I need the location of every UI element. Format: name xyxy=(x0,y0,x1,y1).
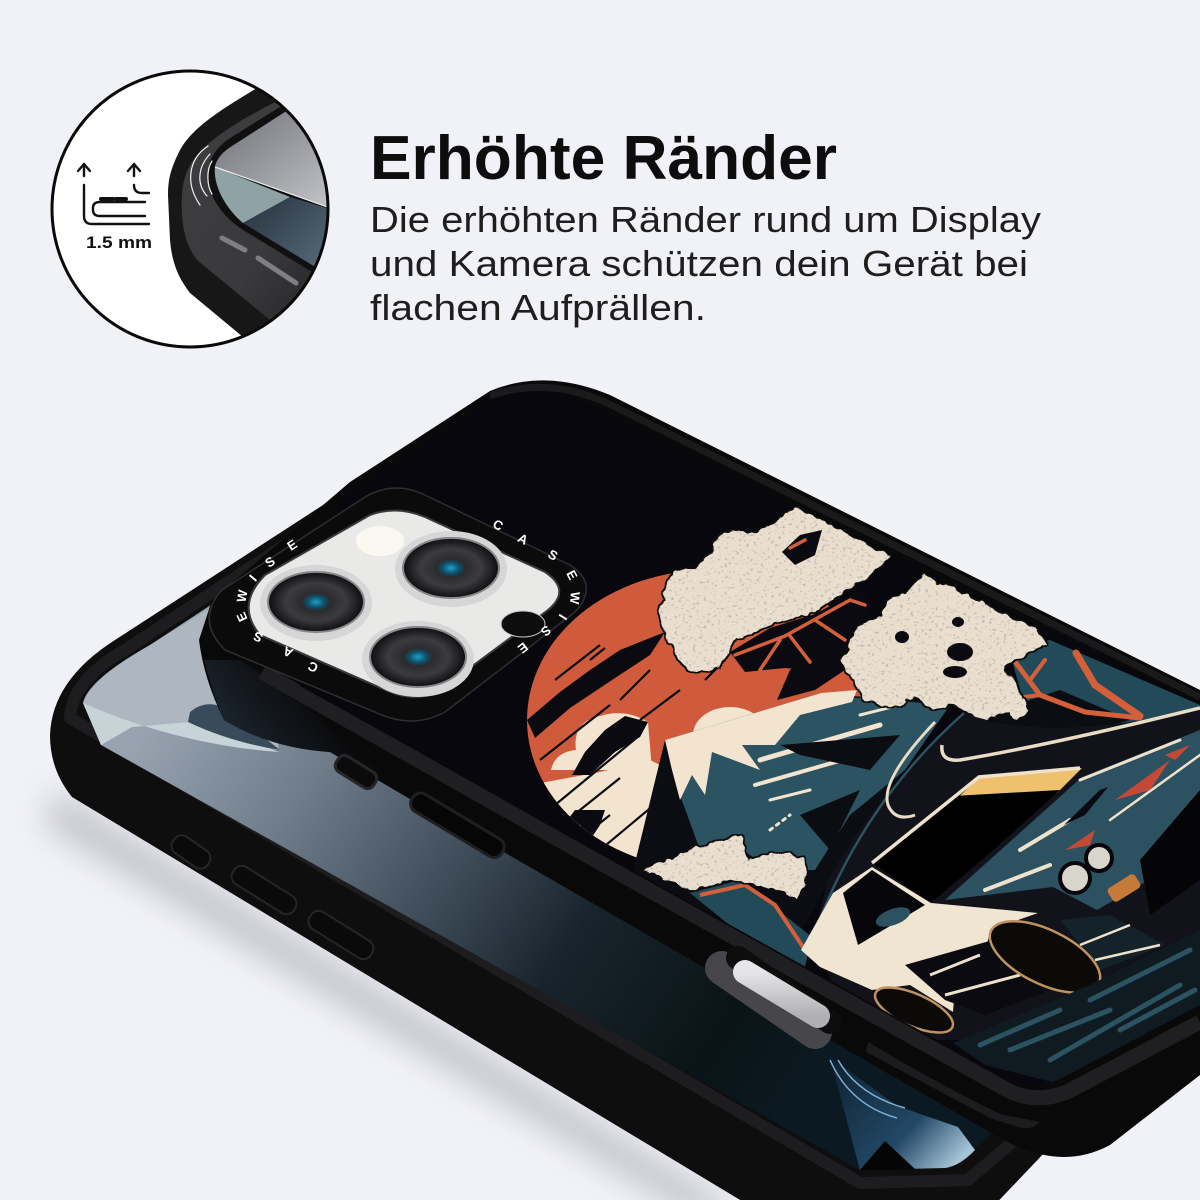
tree one blossom xyxy=(658,507,890,672)
ring brand text: S xyxy=(545,546,561,564)
screen top reflection xyxy=(83,605,279,750)
back phone screen xyxy=(83,520,1000,1170)
screen corner light xyxy=(830,1057,975,1170)
car sill streaks xyxy=(930,955,1020,995)
car yellow reflection xyxy=(953,768,1082,802)
screen pale wedge xyxy=(83,703,279,752)
tree two holes xyxy=(895,617,973,678)
lens bottom xyxy=(362,621,474,697)
car hood xyxy=(945,730,1200,910)
speed lines xyxy=(540,645,725,850)
body text xyxy=(370,199,1041,328)
rim stripe lower xyxy=(262,672,1200,1098)
body text: Die erhöhten Ränder rund um Display xyxy=(370,199,1041,240)
snow streaks xyxy=(705,705,900,830)
car windshield xyxy=(872,790,1060,903)
car indicator xyxy=(1106,873,1142,903)
car lower dark xyxy=(905,938,1050,1015)
lens left xyxy=(260,565,372,641)
front wheel xyxy=(979,906,1111,1008)
screen dark wedge xyxy=(188,704,280,750)
dark mountain shadows xyxy=(780,735,900,850)
ring brand text: I xyxy=(246,572,260,584)
side button: volume up xyxy=(228,862,300,918)
mountain snow xyxy=(665,690,857,800)
camera ring xyxy=(209,488,586,721)
ring brand text xyxy=(233,516,583,676)
back phone case xyxy=(50,470,1047,1200)
bottom drips xyxy=(570,810,605,836)
ring brand text: E xyxy=(284,536,300,554)
charging port xyxy=(722,958,830,1032)
car side body xyxy=(801,867,1038,1012)
shine marks xyxy=(222,238,296,283)
ring brand text: S xyxy=(251,628,265,646)
tree two blossom xyxy=(841,575,1047,721)
ground xyxy=(953,930,1200,1084)
icon: raised edge diagram xyxy=(78,164,149,224)
ring brand text: W xyxy=(234,588,251,603)
black cloud band xyxy=(527,632,665,738)
ring brand text: A xyxy=(280,643,295,661)
rim stripe top xyxy=(490,387,1200,697)
rear wheel xyxy=(869,978,959,1042)
back phone upper rim xyxy=(70,505,1015,1183)
side button: volume down xyxy=(305,907,377,963)
glass dark blue xyxy=(243,197,326,266)
front phone xyxy=(199,380,1200,1157)
right dark cloud xyxy=(777,648,848,700)
cream cloud xyxy=(551,713,652,770)
orange branches right xyxy=(1000,653,1140,718)
car bumper streaks xyxy=(1080,925,1160,960)
sun disk xyxy=(527,573,861,858)
lens top xyxy=(395,531,507,607)
side button: small xyxy=(333,753,379,791)
car grille xyxy=(1140,790,1200,915)
black cloud small xyxy=(572,716,648,775)
mountain teal xyxy=(670,695,950,870)
screen corner streak xyxy=(830,1060,905,1118)
glass teal xyxy=(215,167,290,223)
ring brand text: I xyxy=(556,611,570,623)
camera plate xyxy=(249,510,559,697)
orange branches tree one xyxy=(735,540,865,670)
cream sky xyxy=(544,760,659,858)
body text: und Kamera schützen dein Gerät bei xyxy=(370,243,1028,284)
ring brand text: E xyxy=(515,639,531,657)
ring brand text: C xyxy=(305,658,320,676)
mountain base xyxy=(636,693,861,862)
car bumper xyxy=(1060,915,1165,970)
glass upper xyxy=(215,112,326,207)
label: 1.5 mm: 1.5 mm xyxy=(86,233,152,252)
car hood red marks xyxy=(1065,745,1190,850)
right foliage xyxy=(1009,640,1200,725)
road line xyxy=(818,712,965,918)
ring brand text: E xyxy=(563,568,581,583)
case inner band xyxy=(182,102,312,320)
ring brand text: C xyxy=(490,516,506,534)
car wing mirror xyxy=(873,903,913,931)
side button: power xyxy=(407,790,508,861)
front phone body xyxy=(199,380,1200,1157)
ring brand text: A xyxy=(515,530,531,548)
road swoosh one xyxy=(942,708,1200,760)
ring brand text: S xyxy=(262,553,278,571)
case corner outer xyxy=(168,89,275,336)
lower branch xyxy=(700,884,804,949)
lower foliage xyxy=(690,880,812,967)
cream small sun xyxy=(693,707,754,732)
lidar sensor xyxy=(501,611,545,637)
ring brand text: E xyxy=(233,610,251,624)
car hood streaks xyxy=(985,740,1200,890)
glass highlight xyxy=(215,167,330,208)
rim around glass xyxy=(208,106,326,272)
ground streaks xyxy=(980,950,1195,1060)
back artwork xyxy=(300,508,1200,1082)
tree one dark hollow xyxy=(730,530,855,672)
ring brand text: S xyxy=(538,622,554,640)
detail circle: raised edge close-up xyxy=(51,70,340,348)
tree three blossom xyxy=(644,835,806,898)
side button: switch xyxy=(168,832,214,872)
car headlight one xyxy=(1060,863,1090,893)
road xyxy=(812,708,1200,1040)
car hood scoop xyxy=(1064,787,1108,825)
camera island xyxy=(209,488,586,721)
ring brand text: W xyxy=(567,591,583,605)
shadow xyxy=(45,790,740,1200)
flash xyxy=(356,526,404,556)
side wall reflection xyxy=(204,660,420,805)
right foliage dark xyxy=(1028,690,1130,725)
flex arcs xyxy=(191,146,212,205)
road swoosh two xyxy=(887,722,935,817)
body text: flachen Aufprällen. xyxy=(370,287,706,328)
bumper patch xyxy=(866,1042,1040,1128)
circle outline xyxy=(52,71,328,347)
car windshield frame xyxy=(872,768,1080,863)
art background xyxy=(300,685,407,746)
back phone xyxy=(50,470,1047,1200)
heading: Erhöhte Ränder xyxy=(370,124,837,193)
screen corner triangle xyxy=(860,1141,916,1170)
car headlight two xyxy=(1086,845,1112,871)
car side window xyxy=(843,870,925,945)
